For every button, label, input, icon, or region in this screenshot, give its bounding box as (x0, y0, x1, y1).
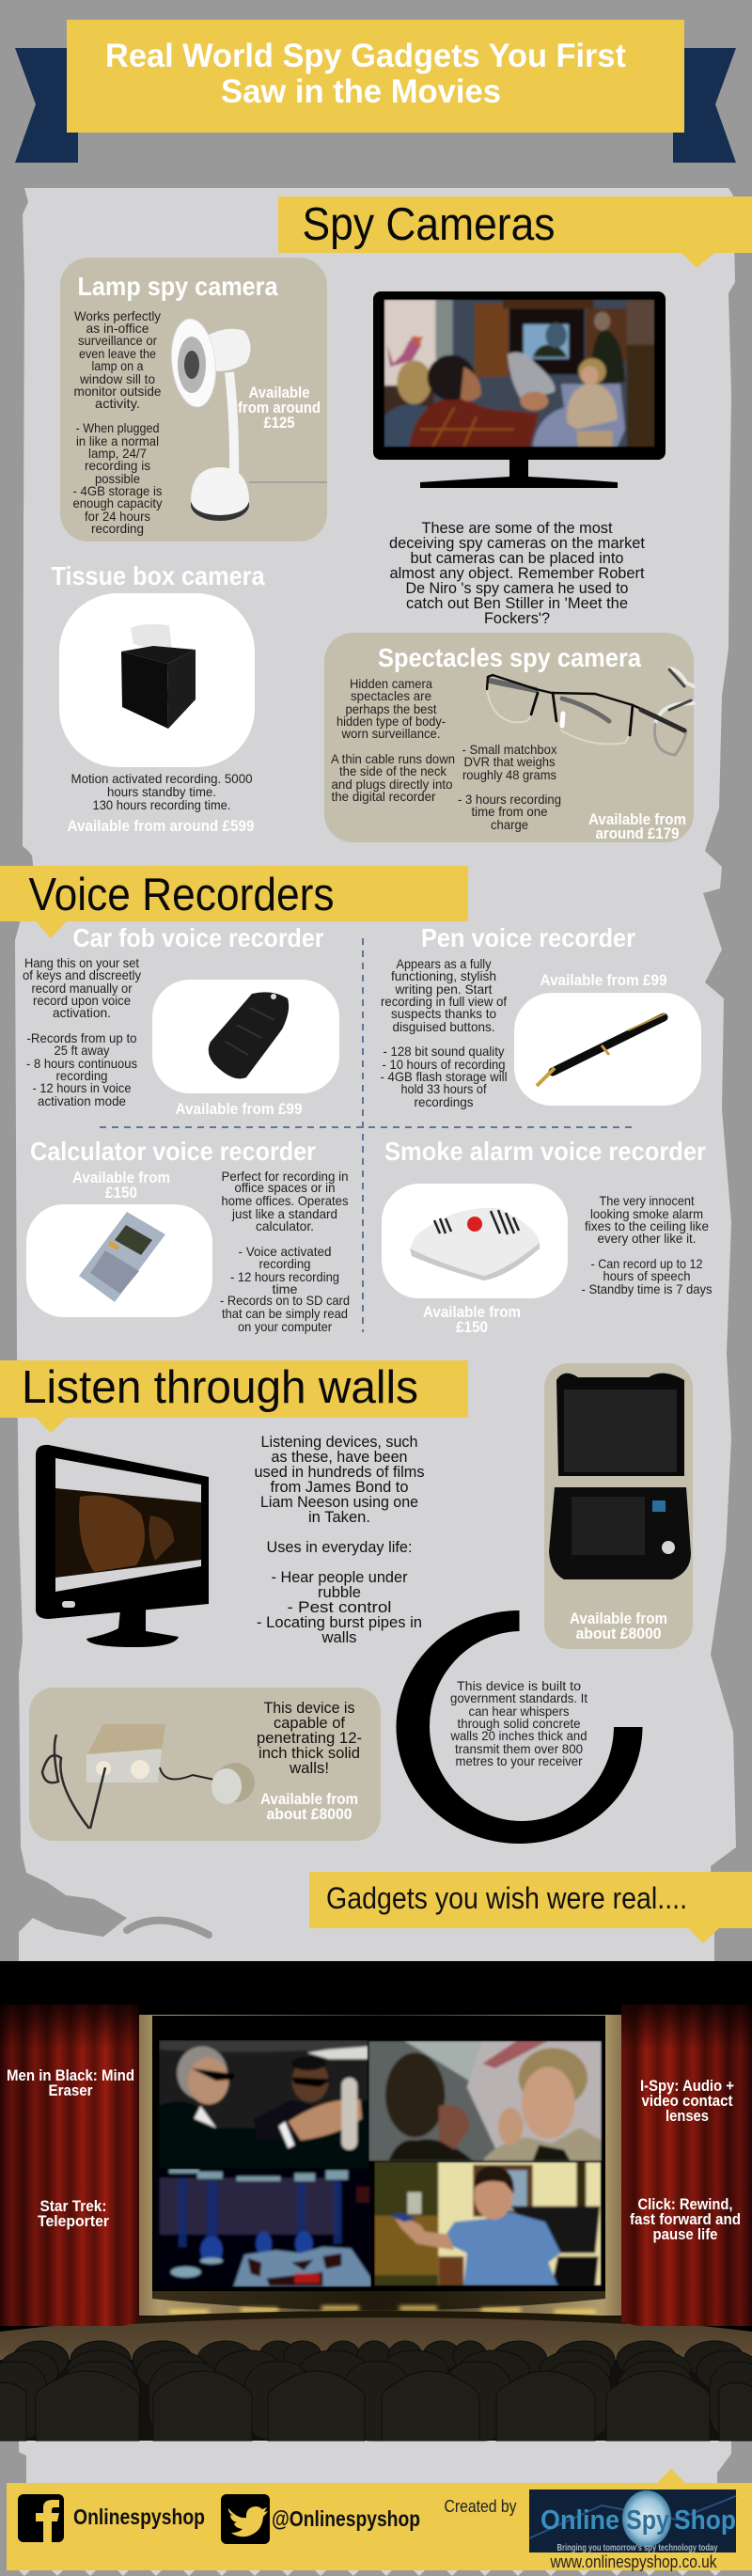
spectacles description: left (331, 676, 455, 804)
calculator description: - Voice activated (239, 1244, 331, 1259)
smoke alarm price: £150 (456, 1319, 488, 1336)
progress ring (397, 1610, 643, 1844)
lamp description: Works perfectly (74, 308, 161, 323)
smoke alarm description: every other like it. (598, 1231, 696, 1246)
calculator description: time (273, 1281, 298, 1296)
smoke alarm price: Available from (423, 1304, 521, 1321)
label: I-Spy: I-Spy: Audio + (640, 2078, 734, 2095)
calculator description: calculator. (256, 1218, 314, 1233)
text block: listening devices (254, 1434, 425, 1646)
monitor: Meet the Fockers scene (373, 291, 666, 488)
film still: I-Spy (368, 2041, 602, 2161)
text block: built to government standards: metres to your receiver (455, 1753, 583, 1768)
text block: intro to spy cameras: deceiving spy cameras on the market (389, 535, 645, 552)
text block: intro to spy cameras: These are some of the most (421, 520, 613, 537)
spectacles description: middle: charge (491, 817, 528, 832)
spectacles description: left: worn surveillance. (341, 726, 440, 741)
logo: Online Spy Shop: Spy (626, 2505, 669, 2536)
calculator description (220, 1169, 350, 1334)
text block: listening devices: used in hundreds of films (254, 1464, 425, 1481)
text block: listening devices: - Hear people under (271, 1569, 408, 1586)
car fob description (23, 955, 141, 1108)
title (105, 38, 626, 110)
label: Click (630, 2196, 741, 2243)
right curtain (621, 2004, 752, 2326)
car fob description: - 12 hours in voice (32, 1080, 132, 1095)
lamp description: possible (95, 471, 140, 486)
car fob description: activation mode (38, 1093, 126, 1108)
website: www.onlinespyshop.co.uk (550, 2552, 717, 2571)
text block: built to government standards: through solid concrete (457, 1716, 581, 1731)
Facebook name: Onlinespyshop (73, 2505, 205, 2529)
car fob description: record manually or (32, 981, 133, 996)
heading: lamp: Lamp spy camera (77, 272, 278, 301)
lamp description: window sill to (79, 371, 155, 386)
tissue box description: 130 hours recording time. (92, 797, 231, 812)
calculator description: home offices. Operates (222, 1193, 348, 1208)
device description (257, 1700, 362, 1777)
lamp description: monitor outside (73, 384, 162, 399)
spectacles description: middle (458, 742, 561, 832)
device price: Available from (260, 1791, 358, 1808)
pen description: functioning, stylish (391, 968, 496, 983)
pen price: Available from £99 (540, 972, 667, 989)
lamp description: for 24 hours (85, 509, 150, 524)
smoke alarm description: looking smoke alarm (590, 1206, 703, 1221)
calculator description: - Records on to SD card (220, 1293, 350, 1308)
text block: listening devices: as these, have been (271, 1449, 408, 1466)
icon: Facebook (18, 2494, 64, 2542)
label: Star Trek (38, 2198, 110, 2230)
text block: listening devices: walls (321, 1629, 357, 1646)
text block: built to government standards: can hear whispers (468, 1704, 570, 1719)
ribbon tails (15, 48, 736, 163)
text block: intro to spy cameras: catch out Ben Stiller in 'Meet the (406, 595, 628, 612)
label: I-Spy (640, 2078, 734, 2125)
calculator description: office spaces or in (235, 1180, 335, 1195)
calculator price: £150 (105, 1185, 137, 1202)
text block: listening devices: from James Bond to (271, 1479, 408, 1496)
text block: intro to spy cameras: almost any object. Remember Robert (389, 565, 645, 582)
spectacles description: left: the digital recorder (331, 789, 436, 804)
icon: Twitter (221, 2494, 270, 2544)
photo: black case (549, 1374, 691, 1579)
spectacles description: left: Hidden camera (350, 676, 432, 691)
heading: car fob: Car fob voice recorder (73, 923, 324, 952)
lamp description (73, 308, 162, 536)
shadow beneath screen (152, 2291, 605, 2311)
tissue box description: Motion activated recording. 5000 (71, 771, 253, 786)
footer bar (7, 2469, 752, 2571)
logo: Online Spy Shop: Shop (674, 2505, 736, 2536)
smoke alarm description (581, 1193, 713, 1296)
third seat row (0, 2362, 752, 2441)
left curtain (0, 2004, 139, 2326)
label: Click: fast forward and (630, 2211, 741, 2228)
lamp description: even leave the (79, 346, 156, 361)
calculator description: - 12 hours recording (230, 1269, 339, 1284)
car fob description: 25 ft away (55, 1043, 109, 1058)
smoke alarm description: The very innocent (600, 1193, 695, 1208)
heading: Gadgets you wish were real: Gadgets you wish were real.... (326, 1881, 687, 1915)
label: Click: pause life (652, 2226, 718, 2243)
second seat row (0, 2350, 752, 2392)
smoke alarm price (423, 1304, 521, 1336)
heading: smoke alarm: Smoke alarm voice recorder (384, 1137, 706, 1166)
spectacles description: left: hidden type of body- (337, 714, 446, 729)
lamp description: - When plugged (75, 420, 160, 435)
text block: listening devices: Uses in everyday life: (267, 1539, 412, 1556)
lamp description: surveillance or (78, 333, 157, 348)
car fob description: recording (56, 1068, 107, 1083)
lamp description: lamp, 24/7 (88, 446, 147, 461)
paper tear marks (127, 1921, 209, 1935)
panel: pen voice recorder (380, 923, 701, 1109)
heading: tissue box: Tissue box camera (51, 561, 265, 590)
lamp price: £125 (263, 415, 295, 432)
cinema scene (0, 1961, 752, 2441)
text block: intro to spy cameras: De Niro 's spy camera he used to (406, 580, 628, 597)
film still: Star Trek (155, 2169, 371, 2287)
logo: Online Spy Shop (529, 2490, 736, 2553)
car fob description: activation. (53, 1005, 111, 1020)
created by: Created by (444, 2497, 517, 2516)
heading: Listen through walls (0, 1360, 468, 1433)
calculator description: recording (259, 1256, 310, 1271)
spectacles description: left: the side of the neck (339, 763, 447, 778)
pen description: recordings (414, 1094, 474, 1109)
heading: Listen through walls: Listen through walls (22, 1362, 418, 1413)
text block: built to government standards (450, 1678, 588, 1768)
calculator description: Perfect for recording in (222, 1169, 348, 1184)
title ribbon (15, 20, 736, 163)
spectacles description: middle: - 3 hours recording (458, 792, 561, 807)
smoke alarm description: - Can record up to 12 (590, 1256, 703, 1271)
photo: device with cable and sensor (42, 1724, 255, 1829)
icon: desk lamp (167, 317, 327, 521)
text block: built to government standards: This device is built to (457, 1678, 581, 1693)
back seat row (12, 2341, 744, 2379)
case price: Available from (570, 1610, 667, 1627)
panel: tissue box camera (51, 561, 265, 835)
text block: built to government standards: walls 20 inches thick and (450, 1728, 587, 1743)
photo: spectacles (487, 668, 694, 755)
lamp description: lamp on a (92, 358, 144, 373)
spectacles description: middle: roughly 48 grams (462, 767, 556, 782)
film still: Men in Black (159, 2040, 368, 2169)
car fob description: of keys and discreetly (23, 967, 141, 982)
cinema screen (152, 2016, 605, 2291)
text block: intro to spy cameras (389, 520, 645, 627)
car fob description: Hang this on your set (24, 955, 139, 970)
smoke alarm description: - Standby time is 7 days (581, 1281, 713, 1296)
stage edge (132, 2311, 628, 2324)
calculator price: Available from (72, 1170, 170, 1186)
text block: listening devices: Liam Neeson using one (260, 1494, 418, 1511)
film still (384, 299, 655, 448)
text block: intro to spy cameras: but cameras can be placed into (410, 550, 624, 567)
heading: Voice Recorders (0, 866, 468, 938)
text block: built to government standards: government standards. It (450, 1690, 588, 1705)
label: Star Trek: Teleporter (38, 2213, 110, 2230)
lamp price (238, 385, 321, 432)
stage floor (0, 2313, 752, 2379)
heading: calculator: Calculator voice recorder (30, 1137, 316, 1166)
text block: intro to spy cameras: Fockers'? (484, 610, 550, 627)
spectacles price (588, 811, 686, 842)
tissue box description: hours standby time. (107, 784, 216, 799)
spectacles price: around £179 (596, 825, 679, 842)
text block: listening devices: Listening devices, such (261, 1434, 417, 1451)
cinema back wall (139, 2015, 621, 2316)
panel: calculator voice recorder (26, 1137, 350, 1334)
text block: listening devices: rubble (318, 1584, 361, 1601)
device description: inch thick solid (258, 1745, 360, 1762)
lamp description: enough capacity (73, 495, 162, 510)
calculator price (72, 1170, 170, 1202)
car fob description: - 8 hours continuous (26, 1056, 137, 1071)
lamp description: recording (91, 521, 144, 536)
heading: Gadgets you wish were real (309, 1872, 752, 1943)
pen description: writing pen. Start (395, 982, 493, 997)
case price: about £8000 (575, 1626, 662, 1642)
pen description: - 128 bit sound quality (384, 1044, 504, 1059)
pen description: recording in full view of (381, 994, 507, 1009)
label: Star Trek: Star Trek: (39, 2198, 107, 2215)
spectacles description: middle: time from one (472, 804, 548, 819)
photo: calculator (26, 1204, 212, 1317)
label: Men in Black: Eraser (49, 2082, 93, 2099)
pen description: disguised buttons. (393, 1019, 494, 1034)
device price: about £8000 (267, 1806, 352, 1823)
Twitter handle: @Onlinespyshop (272, 2506, 420, 2531)
front seat row (0, 2371, 752, 2441)
spectacles price: Available from (588, 811, 686, 828)
torn paper lower strip (19, 2435, 731, 2487)
device description: penetrating 12- (257, 1730, 362, 1747)
spectacles description: middle: - Small matchbox (462, 742, 556, 757)
pen description: Appears as a fully (397, 956, 491, 971)
spectacles description: left: perhaps the best (346, 701, 437, 716)
icon: tilted monitor showing Taken (36, 1445, 209, 1647)
heading: spectacles: Spectacles spy camera (378, 643, 641, 672)
tissue box description (71, 771, 253, 812)
panel: smoke alarm voice recorder (382, 1137, 713, 1336)
pen description: - 4GB flash storage will (380, 1069, 508, 1084)
label: I-Spy: video contact (641, 2093, 733, 2110)
pen description: suspects thanks to (391, 1006, 496, 1021)
text block: listening devices: in Taken. (308, 1509, 370, 1526)
text block: listening devices: - Pest control (288, 1599, 391, 1616)
calculator description: on your computer (238, 1319, 332, 1334)
spectacles description: left: A thin cable runs down (331, 751, 455, 766)
label: Men in Black: Men in Black: Mind (7, 2067, 134, 2084)
case price (570, 1610, 667, 1642)
torn paper panel (15, 188, 736, 1965)
lamp description: as in-office (86, 321, 149, 336)
device description: capable of (274, 1715, 345, 1732)
label: I-Spy: lenses (666, 2108, 709, 2125)
device price (260, 1791, 358, 1823)
heading: Spy Cameras: Spy Cameras (303, 199, 555, 250)
panel: through-wall listening device (29, 1688, 381, 1841)
smoke alarm description: fixes to the ceiling like (585, 1218, 709, 1233)
title: Real World Spy Gadgets You First (105, 38, 626, 74)
lamp description: in like a normal (76, 433, 159, 448)
logo: Online Spy Shop: Online (540, 2505, 619, 2536)
film still: Click (374, 2161, 602, 2285)
photo: tissue box (59, 593, 255, 767)
label: Click: Click: Rewind, (637, 2196, 733, 2213)
lamp price: from around (238, 400, 321, 416)
dashed quadrant dividers (100, 938, 633, 1332)
pen description: - 10 hours of recording (382, 1057, 506, 1072)
stage lights (169, 2306, 596, 2314)
car fob description: -Records from up to (26, 1030, 137, 1045)
lamp price: Available (248, 385, 310, 401)
photo: smoke alarm (382, 1184, 568, 1298)
seats (0, 2341, 752, 2441)
panel: car fob voice recorder (23, 923, 339, 1118)
photo: car fob (152, 980, 339, 1093)
car fob price: Available from £99 (175, 1101, 303, 1118)
heading: Spy Cameras (278, 196, 752, 268)
panel: government listening device case (544, 1363, 693, 1649)
text block: built to government standards: transmit them over 800 (455, 1741, 583, 1756)
smoke alarm description: hours of speech (603, 1268, 690, 1283)
device description: This device is (263, 1700, 355, 1717)
pen description (380, 956, 508, 1109)
title banner (67, 20, 684, 133)
pen description: hold 33 hours of (400, 1081, 487, 1096)
panel: spectacles spy camera (324, 633, 694, 842)
text block: listening devices: - Locating burst pipes in (257, 1614, 422, 1631)
device description: walls! (289, 1760, 329, 1777)
bottom edge ticks (19, 2570, 721, 2576)
calculator description: that can be simply read (222, 1306, 348, 1321)
lamp description: - 4GB storage is (73, 483, 162, 498)
heading: Voice Recorders: Voice Recorders (28, 870, 335, 920)
spectacles description: left: and plugs directly into (331, 777, 453, 792)
photo: pen (514, 993, 701, 1106)
tissue box price: Available from around £599 (68, 818, 254, 835)
calculator description: just like a standard (231, 1206, 337, 1221)
panel: lamp spy camera (60, 258, 327, 542)
title: Saw in the Movies (221, 73, 501, 110)
heading: pen: Pen voice recorder (421, 923, 635, 952)
label: Men in Black (7, 2067, 134, 2099)
lamp description: recording is (85, 458, 150, 473)
spectacles description: left: spectacles are (351, 688, 431, 703)
spectacles description: middle: DVR that weighs (464, 754, 555, 769)
lamp description: activity. (95, 396, 140, 411)
car fob description: record upon voice (33, 993, 131, 1008)
